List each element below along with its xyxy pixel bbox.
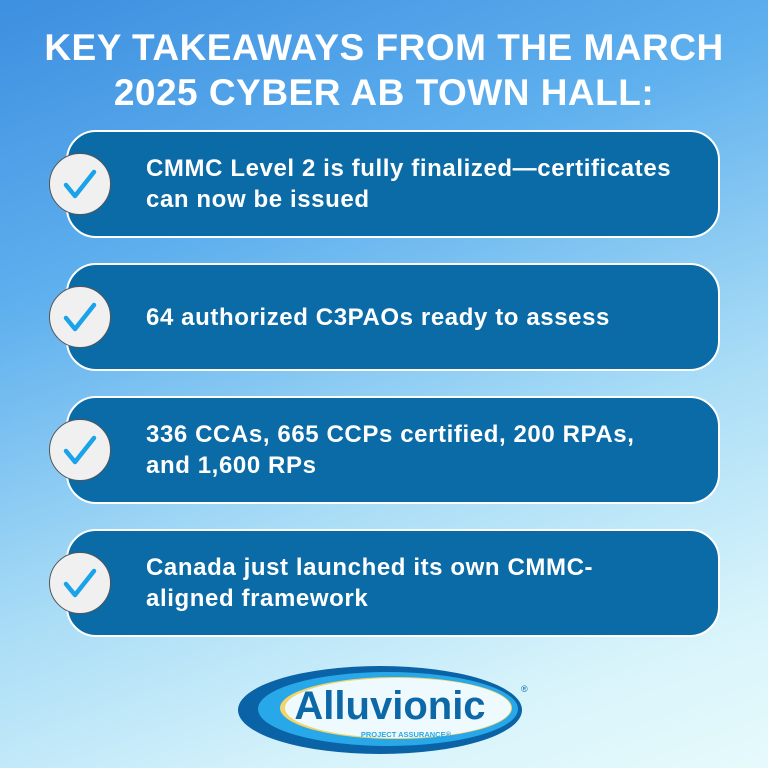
logo: Alluvionic (294, 684, 486, 728)
panel: item 4 (66, 529, 720, 637)
title (44, 27, 724, 113)
title: KEY TAKEAWAYS FROM THE MARCH (44, 27, 724, 68)
panel: item 3: 336 CCAs, 665 CCPs certified, 200 RPAs, and 1,600 RPs (146, 421, 635, 479)
panel: item 4: aligned framework (146, 585, 368, 612)
icon: check 1 (49, 153, 111, 215)
icon: check 3 (49, 419, 111, 481)
panel: item 4: Canada just launched its own CMMC- (146, 554, 593, 581)
panel: item 2 (66, 263, 720, 371)
logo: PROJECT ASSURANCE® (361, 730, 452, 739)
logo: ® (521, 684, 528, 694)
panel: item 1 (66, 130, 720, 238)
panel: item 1: CMMC Level 2 is fully finalized—certificates can now be issued (146, 155, 671, 213)
panel: item 3 (66, 396, 720, 504)
icon: check 4 (49, 552, 111, 614)
logo (238, 666, 528, 754)
title: 2025 CYBER AB TOWN HALL: (114, 72, 654, 113)
panel: item 2: 64 authorized C3PAOs ready to assess (146, 304, 610, 330)
icon: check 2 (49, 286, 111, 348)
